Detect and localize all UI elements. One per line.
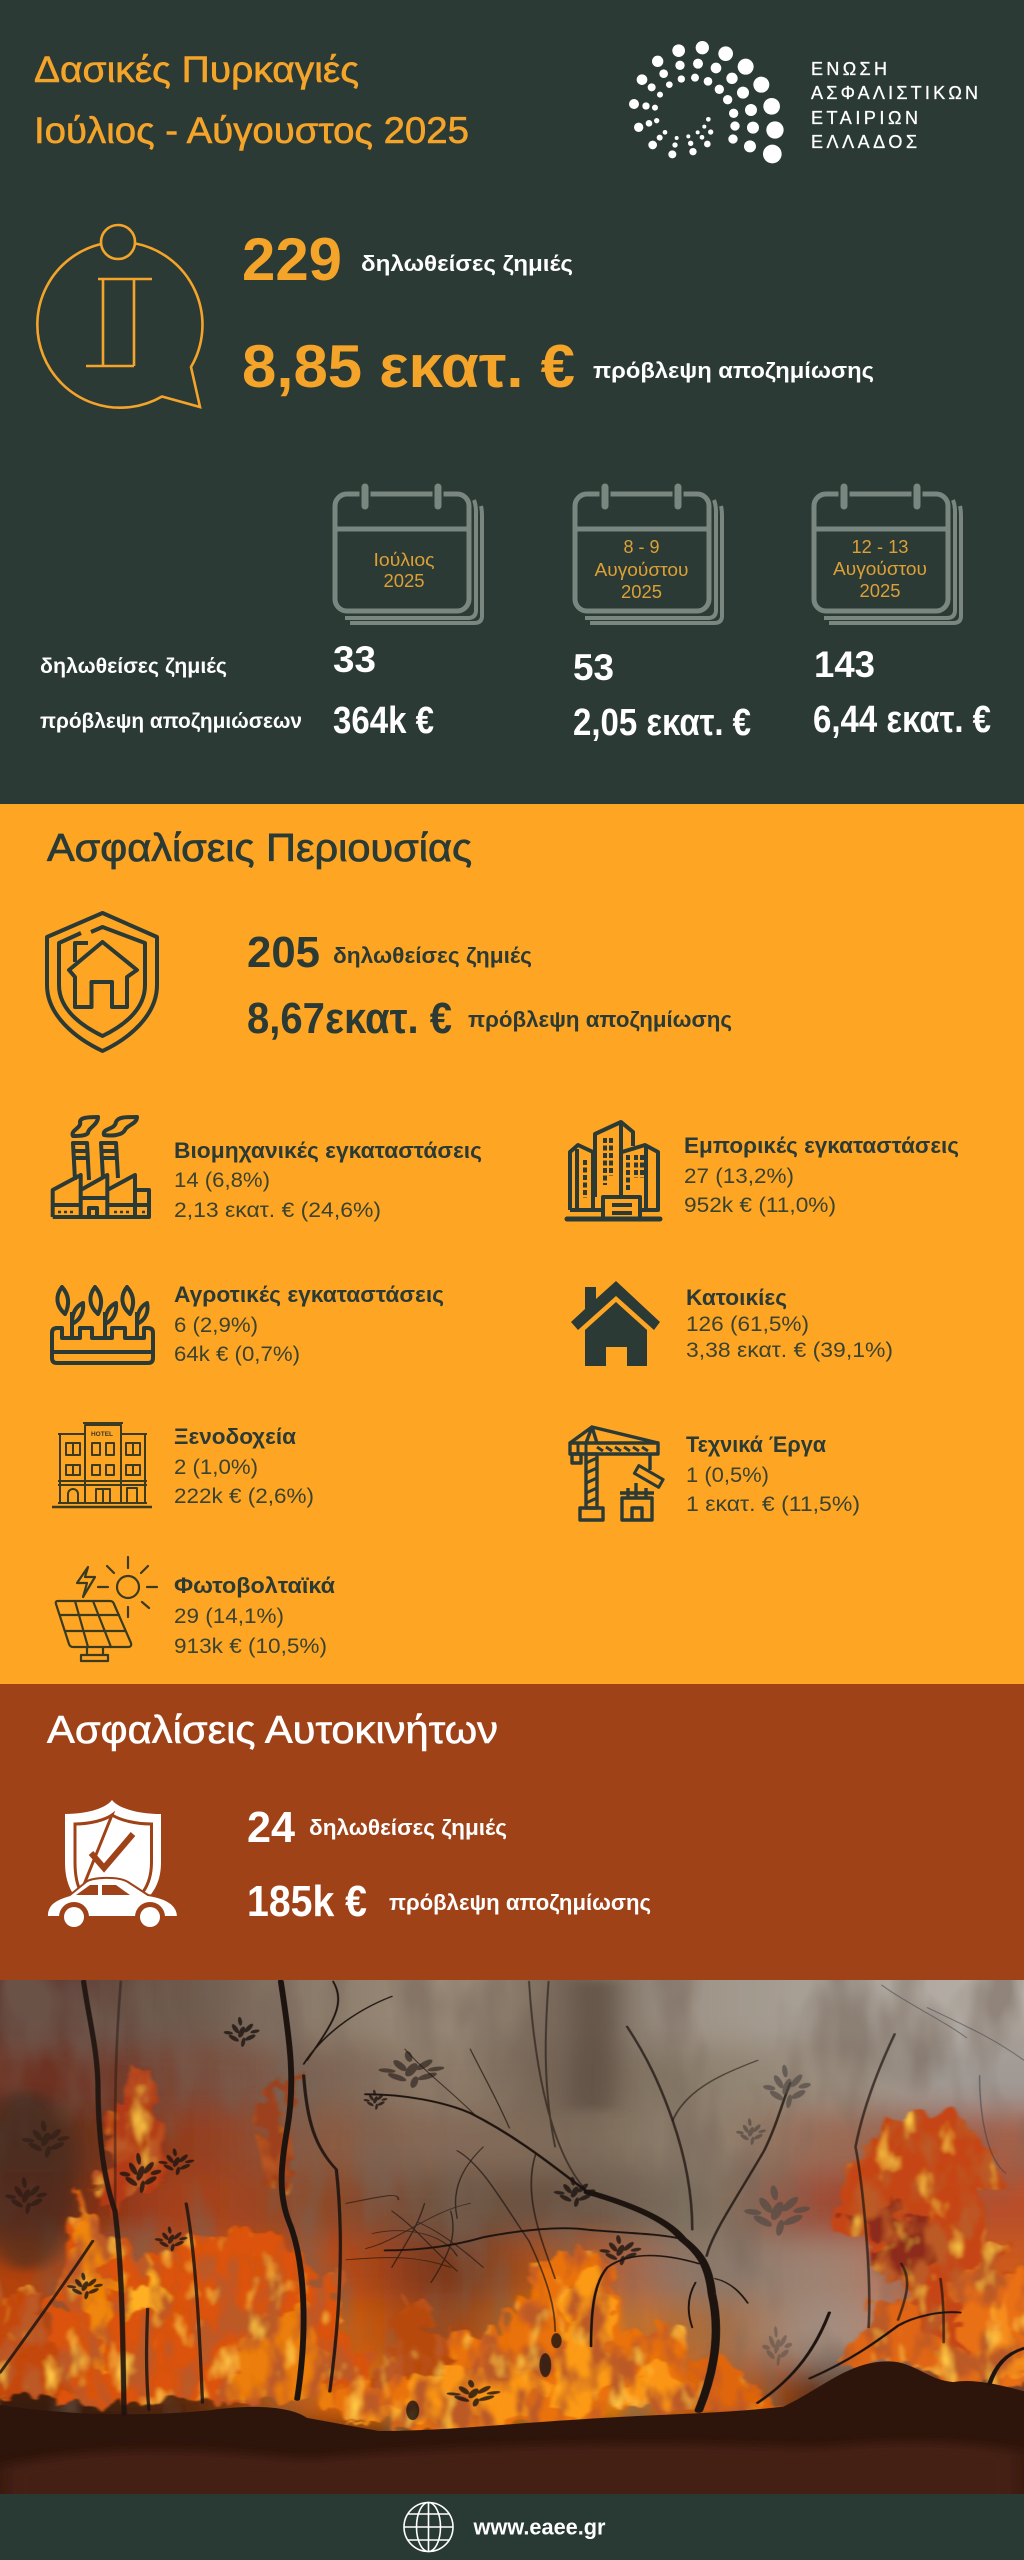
logo: Ένωση Ασφαλιστικών Εταιριών Ελλάδος <box>629 41 978 163</box>
text: agricultural: 64k € (0,7%) <box>174 1343 300 1366</box>
tree trunks and branches <box>0 1981 1024 2414</box>
icon: solar panel and sun <box>56 1557 157 1661</box>
table: period figures: 6,44 εκατ. € <box>813 699 991 741</box>
icon: globe <box>404 2502 453 2552</box>
icon: crane <box>570 1427 663 1520</box>
text: residential: 126 (61,5%) <box>686 1313 809 1336</box>
text: hotels: Ξενοδοχεία <box>174 1424 296 1449</box>
text: agricultural <box>174 1282 444 1366</box>
table: period figures: 143 <box>814 644 875 685</box>
text: industrial: 2,13 εκατ. € (24,6%) <box>174 1199 381 1222</box>
text: residential: Κατοικίες <box>686 1285 787 1310</box>
logo wordmark: ΕΝΩΣΗ <box>811 59 887 79</box>
icon: office buildings <box>567 1122 660 1219</box>
text: photovoltaics: Φωτοβολταϊκά <box>174 1573 335 1598</box>
icon: calendar 8-9 August <box>575 487 722 623</box>
icon label: hotel sign: HOTEL <box>91 1431 113 1438</box>
text: industrial: 14 (6,8%) <box>174 1169 270 1192</box>
logo wordmark: ΕΛΛΑΔΟΣ <box>811 132 917 152</box>
title: Δασικές Πυρκαγιές <box>34 49 359 90</box>
panel: header background <box>0 0 1024 804</box>
icon: calendar 12-13 August: 2025 <box>860 581 900 601</box>
text: industrial <box>174 1138 482 1222</box>
icon: calendar 8-9 August: Αυγούστου <box>594 560 688 580</box>
motor claims <box>247 1803 507 1852</box>
property compensation <box>247 994 732 1043</box>
icon: shield with car <box>47 1800 178 1927</box>
text: hotels: 222k € (2,6%) <box>174 1485 314 1508</box>
total claims <box>242 226 573 293</box>
text: commercial: 27 (13,2%) <box>684 1165 794 1188</box>
total compensation: 8,85 εκατ. € <box>242 333 575 400</box>
text: agricultural: 6 (2,9%) <box>174 1314 258 1337</box>
item: commercial <box>567 1122 959 1219</box>
foliage <box>5 2017 642 2420</box>
table: period figures: 2,05 εκατ. € <box>573 702 751 744</box>
icon: factory <box>53 1117 149 1217</box>
property claims: δηλωθείσες ζημιές <box>333 943 532 968</box>
item: agricultural <box>52 1282 444 1366</box>
text: photovoltaics: 29 (14,1%) <box>174 1605 284 1628</box>
table: period figures: 53 <box>573 647 614 688</box>
table: period figures: 364k € <box>333 700 434 742</box>
panel: motor insurance background <box>0 1684 1024 1980</box>
logo wordmark: ΑΣΦΑΛΙΣΤΙΚΩΝ <box>811 83 978 103</box>
dark smoke on the left edge <box>0 2090 78 2271</box>
smoky background trunk <box>591 1981 595 2109</box>
text: hotels <box>174 1424 314 1508</box>
logo wordmark: ΕΤΑΙΡΙΩΝ <box>811 108 918 128</box>
item: industrial <box>53 1117 482 1222</box>
text: residential <box>686 1285 893 1362</box>
item: technical works <box>570 1427 860 1520</box>
text: commercial <box>684 1133 959 1217</box>
motor compensation <box>247 1877 651 1926</box>
item: hotels <box>52 1423 314 1508</box>
icon: calendar July: 2025 <box>384 571 424 591</box>
panel: property insurance background <box>0 804 1024 1684</box>
item: photovoltaics <box>56 1557 335 1661</box>
text: commercial: Εμπορικές εγκαταστάσεις <box>684 1133 959 1158</box>
icon: logo dots <box>629 41 784 163</box>
icon: shield with house <box>47 913 157 1051</box>
heading: property insurance: Ασφαλίσεις Περιουσίας <box>47 827 472 870</box>
table: period figures: 33 <box>333 639 376 680</box>
text: technical works: 1 (0,5%) <box>686 1464 769 1487</box>
icon: calendar 8-9 August: 2025 <box>621 582 662 602</box>
icon: calendar 8-9 August: 8 - 9 <box>624 537 660 557</box>
table: period figures: πρόβλεψη αποζημιώσεων <box>40 710 302 733</box>
icon: plants in planter <box>52 1287 153 1363</box>
motor claims: 24 <box>247 1803 296 1852</box>
icon: calendar 12-13 August: 12 - 13 <box>852 537 908 557</box>
text: commercial: 952k € (11,0%) <box>684 1194 836 1217</box>
icon: calendar July <box>335 487 482 623</box>
motor claims: δηλωθείσες ζημιές <box>309 1815 507 1840</box>
flames <box>0 2072 1024 2437</box>
website: www.eaee.gr <box>473 2514 606 2540</box>
property claims: 205 <box>247 928 320 977</box>
motor compensation: 185k € <box>247 1877 367 1926</box>
table: period figures: δηλωθείσες ζημιές <box>40 655 227 678</box>
icon: house <box>571 1281 660 1366</box>
heading: motor insurance: Ασφαλίσεις Αυτοκινήτων <box>47 1709 498 1752</box>
text: photovoltaics: 913k € (10,5%) <box>174 1635 327 1658</box>
total compensation: πρόβλεψη αποζημίωσης <box>593 358 874 383</box>
text: industrial: Βιομηχανικές εγκαταστάσεις <box>174 1138 482 1163</box>
motor compensation: πρόβλεψη αποζημίωσης <box>389 1890 651 1915</box>
total compensation <box>242 333 874 400</box>
text: technical works: 1 εκατ. € (11,5%) <box>686 1493 860 1516</box>
icon: calendar July: Ιούλιος <box>374 550 435 570</box>
property compensation: πρόβλεψη αποζημίωσης <box>468 1007 732 1032</box>
total claims: 229 <box>242 226 342 293</box>
photo: forest fire scene <box>0 1980 1024 2544</box>
logo wordmark <box>811 59 978 152</box>
smoke texture <box>0 1970 1024 2346</box>
item: residential <box>571 1281 893 1366</box>
text: residential: 3,38 εκατ. € (39,1%) <box>686 1339 893 1362</box>
icon: calendar 12-13 August: Αυγούστου <box>833 559 927 579</box>
text: photovoltaics <box>174 1573 335 1658</box>
icon: info speech bubble <box>37 225 202 408</box>
property claims <box>247 928 532 977</box>
icon: calendar 12-13 August <box>814 487 961 623</box>
icon: hotel <box>52 1423 152 1507</box>
panel: footer background <box>0 2494 1024 2560</box>
text: agricultural: Αγροτικές εγκαταστάσεις <box>174 1282 444 1307</box>
text: technical works: Τεχνικά Έργα <box>686 1432 826 1457</box>
ground and mound <box>0 2361 1024 2471</box>
property compensation: 8,67εκατ. € <box>247 994 452 1043</box>
text: hotels: 2 (1,0%) <box>174 1456 258 1479</box>
text: technical works <box>686 1432 860 1516</box>
title: Ιούλιος - Αύγουστος 2025 <box>34 110 469 151</box>
total claims: δηλωθείσες ζημιές <box>361 251 573 276</box>
title <box>34 49 469 151</box>
table: period figures <box>40 639 991 744</box>
